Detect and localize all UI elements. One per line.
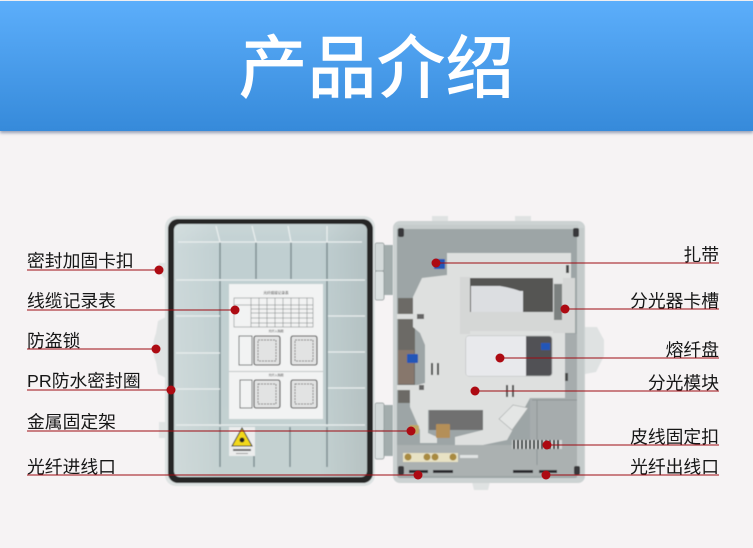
lid ribs [220,242,327,467]
callout: PR防水密封圈 [27,371,176,394]
record sheet: 光纤入箱图 [268,328,284,333]
callout: 熔纤盘: 熔纤盘 [666,340,719,360]
splitter bracket [460,277,575,334]
callout: 熔纤盘 [496,340,719,362]
callout: 光纤进线口: 光纤进线口 [27,457,116,477]
base outer tabs [432,216,604,490]
callout: 线缆记录表 [27,291,240,314]
callout: 防盗锁 [27,331,160,354]
dark left cavity [398,298,415,403]
callout: 光纤出线口: 光纤出线口 [630,457,719,477]
upper window [470,278,553,313]
callout: 金属固定架: 金属固定架 [27,412,116,432]
slots [431,265,569,397]
callout: 扎带 [432,245,719,268]
record sheet: 光纤熔接记录表 [263,290,289,295]
callout: 分光器卡槽: 分光器卡槽 [630,291,719,311]
hinges [375,243,393,459]
grounding post [409,425,419,434]
splitter tray plate [410,253,575,445]
right and lower floor [530,334,578,476]
cable clamp comb [512,440,562,449]
diagrams [239,336,317,408]
callout: 光纤出线口 [542,457,719,480]
bottom cut-out with metal bracket [429,410,483,438]
lid outer shell [165,216,375,486]
lid side tabs [153,263,167,438]
table [234,298,313,327]
callout: 光纤进线口 [27,457,422,480]
open lid (left) [153,216,375,486]
record sheet [229,284,323,419]
lower window [466,336,552,376]
base floor [397,226,578,478]
rubber seal [168,219,373,483]
laser warning label [229,427,255,456]
callout: 扎带: 扎带 [683,245,719,265]
callout: 分光器卡槽 [560,291,719,314]
record sheet: 光纤入箱图 [268,372,284,377]
title: 产品介绍 [238,30,514,107]
callout: 分光模块: 分光模块 [648,373,719,393]
small side clips [397,314,424,390]
lid inner tray [174,224,367,477]
bottom brass terminals [403,453,478,462]
callout: PR防水密封圈: PR防水密封圈 [27,371,141,391]
callout: 金属固定架 [27,412,416,436]
open base box (right) [393,216,604,490]
callout: 分光模块 [470,373,719,396]
base shell [393,221,585,483]
callout: 密封加固卡扣 [27,251,164,274]
header banner [0,1,753,131]
callout: 皮线固定扣: 皮线固定扣 [630,427,719,447]
cable ports [409,470,557,473]
blue cable clips [407,259,445,363]
callout: 线缆记录表: 线缆记录表 [27,291,116,311]
splitter latch [499,405,528,430]
callout: 皮线固定扣 [542,427,719,450]
corner posts [398,228,580,475]
callout: 防盗锁: 防盗锁 [27,331,81,351]
callout: 密封加固卡扣: 密封加固卡扣 [27,251,134,271]
